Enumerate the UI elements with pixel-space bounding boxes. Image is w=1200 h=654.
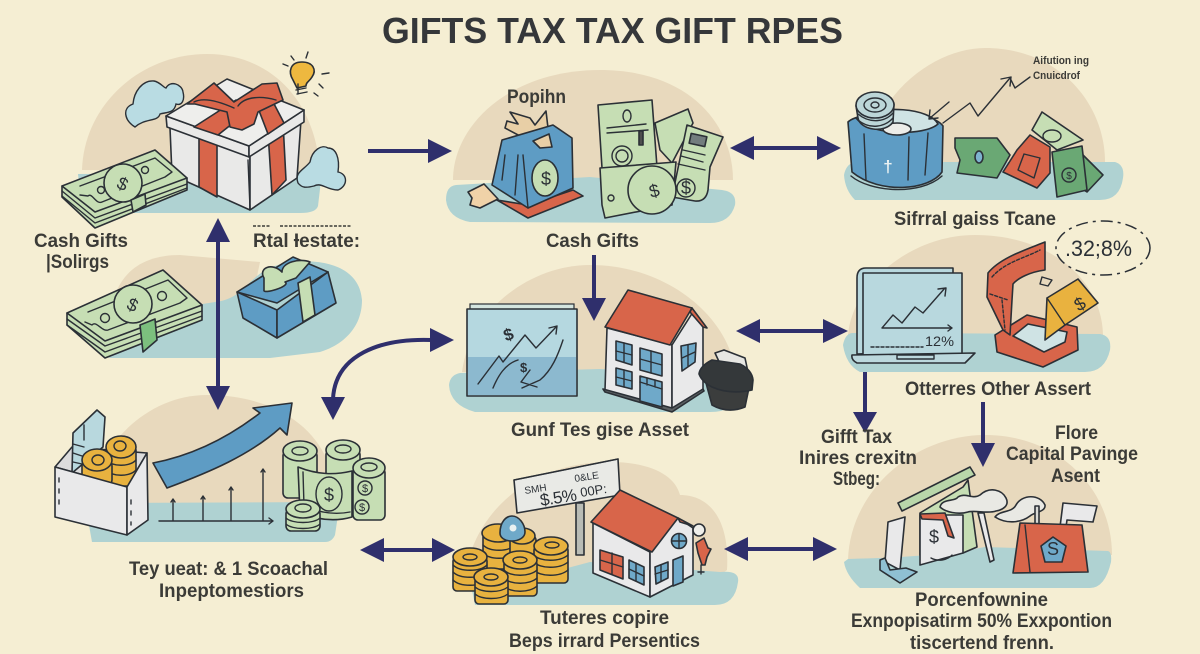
label: gift tax steg	[799, 427, 917, 490]
callout: percentage oval	[1056, 221, 1150, 275]
panel: gift box and cash	[62, 52, 346, 228]
panel: growth and coins	[55, 395, 385, 542]
label: tey ueat	[129, 559, 328, 602]
arrow: gift to popin	[368, 139, 452, 163]
label: cash gifts savings: |Solirgs	[46, 252, 109, 273]
icon: small house	[591, 490, 693, 597]
icon: cash rolls	[283, 440, 385, 531]
icon: sale sign: SMH	[524, 483, 547, 497]
label: flore capital: Capital Pavinge	[1006, 444, 1138, 465]
panel: capital saving asset	[844, 435, 1112, 588]
icon: bills and papers: $	[681, 178, 691, 198]
label: adding control	[1033, 55, 1089, 82]
panel: savings can and chart	[844, 48, 1123, 200]
icon: laptop chart	[852, 268, 975, 363]
icon: box with coins	[55, 410, 148, 535]
icon: blue can with coins	[848, 92, 943, 190]
icon: light bulb	[283, 52, 329, 96]
label: flore capital: Flore	[1055, 423, 1098, 444]
label: tuteres copire: Beps irrard Persentics	[509, 631, 700, 652]
label: adding control: Aifution ing	[1033, 55, 1089, 67]
icon: cash stack	[67, 270, 202, 358]
label: adding control: Cnuicdrof	[1033, 70, 1080, 82]
label: popin: Popihn	[507, 87, 566, 108]
icon: blue bag	[468, 111, 583, 218]
icon: laptop chart: 12%	[925, 333, 954, 349]
arrow: vertical double	[206, 218, 230, 410]
panel: stocks and house	[449, 265, 753, 412]
label: flore capital: Asent	[1051, 466, 1101, 487]
label: gunf tes: Gunf Tes gise Asset	[511, 420, 690, 441]
icon: bills and papers	[598, 100, 723, 218]
icon: sale sign: $.5%	[539, 485, 578, 510]
arrow: coins right double	[724, 537, 837, 561]
icon: cash stack: $	[124, 294, 141, 316]
label: tuteres copire	[509, 608, 700, 652]
icon: red bag with flag: S	[1047, 539, 1059, 559]
label: flore capital	[1006, 423, 1138, 487]
icon: red figure	[693, 524, 711, 574]
label: real estate: Rtal Ɨestate:	[253, 231, 360, 252]
label: gift tax steg: Gifft Tax	[821, 427, 892, 448]
callout: percentage oval: .32;8%	[1065, 236, 1132, 261]
icon: cash rolls: $	[324, 485, 334, 505]
bar chart	[159, 469, 273, 524]
icon: bills and papers: $	[647, 180, 662, 202]
icon: stock chart	[467, 304, 577, 396]
icon: gold coin stacks	[453, 516, 568, 604]
icon: blue bag: $	[541, 169, 551, 189]
icon: shelter with bag	[880, 467, 994, 583]
panel: real estate gift	[67, 255, 362, 358]
icon: cash rolls: $	[362, 483, 368, 495]
icon: right cloud	[297, 147, 346, 190]
icon: green and red items: $	[1066, 171, 1072, 182]
icon: stock chart: $	[501, 324, 517, 345]
label: cash gifts center: Cash Gifts	[546, 231, 639, 252]
icon: blue growth arrow	[153, 403, 292, 488]
icon: zig-zag growth arrow	[929, 77, 1030, 123]
label: other asset: Otterres Other Assert	[905, 379, 1092, 400]
arrow: curved double	[321, 328, 454, 420]
label: tey ueat: Inpeptomestiors	[159, 581, 304, 602]
icon: left cloud	[126, 81, 184, 127]
label: tey ueat: Tey ueat: & 1 Scoachal	[129, 559, 328, 580]
icon: sale sign: 00P:	[579, 481, 608, 500]
icon: sale sign	[514, 459, 620, 555]
label: gift tax steg: Stbeg:	[833, 469, 880, 490]
label: cash gifts savings: Cash Gifts	[34, 231, 128, 252]
panel: laptop and ring	[843, 235, 1110, 372]
arrow: laptop down	[853, 372, 877, 433]
icon: yellow money note: $	[1071, 293, 1089, 315]
icon: blue can with coins: †	[883, 157, 893, 176]
icon: yellow money note	[1045, 279, 1098, 340]
icon: sale sign: 0&LE	[574, 470, 600, 485]
label: gift tax steg: Inires crexitn	[799, 448, 917, 469]
label: porcenfownine: Exnpopisatirm 50% Exxpontion	[851, 611, 1112, 632]
label: tuteres copire: Tuteres copire	[540, 608, 669, 629]
title: GIFTS TAX TAX GIFT RPES	[382, 10, 843, 51]
panel: coins house and sign	[453, 459, 738, 605]
icon: cash stack	[62, 150, 187, 228]
icon: smoke clouds	[940, 490, 1045, 522]
panel: cash gifts popin	[446, 70, 735, 223]
icon: shelter with bag: $	[929, 527, 939, 547]
arrow: popin to savings	[730, 136, 841, 160]
icon: red bag with flag	[1013, 503, 1097, 573]
icon: black bin	[699, 350, 753, 410]
arrow: other asset down	[971, 402, 995, 467]
icon: gift box	[166, 79, 304, 210]
icon: green and red items	[955, 112, 1103, 197]
label: porcenfownine	[851, 590, 1112, 654]
label: cash gifts savings	[34, 231, 128, 273]
icon: stock chart: $	[520, 360, 528, 375]
label: porcenfownine: Porcenfownine	[915, 590, 1048, 611]
icon: cash rolls: $	[359, 502, 365, 514]
icon: red ring	[987, 242, 1078, 367]
arrow: stocks to laptop	[736, 319, 848, 343]
arrow: cash gifts down	[582, 255, 606, 321]
icon: blue gift	[237, 257, 336, 338]
label: porcenfownine: tiscertend frenn.	[910, 633, 1054, 654]
label: sifrral gains: Sifrral gaiss Tcane	[894, 209, 1056, 230]
icon: house	[603, 290, 707, 412]
icon: cash stack: $	[114, 173, 131, 195]
arrow: coins left double	[360, 538, 455, 562]
